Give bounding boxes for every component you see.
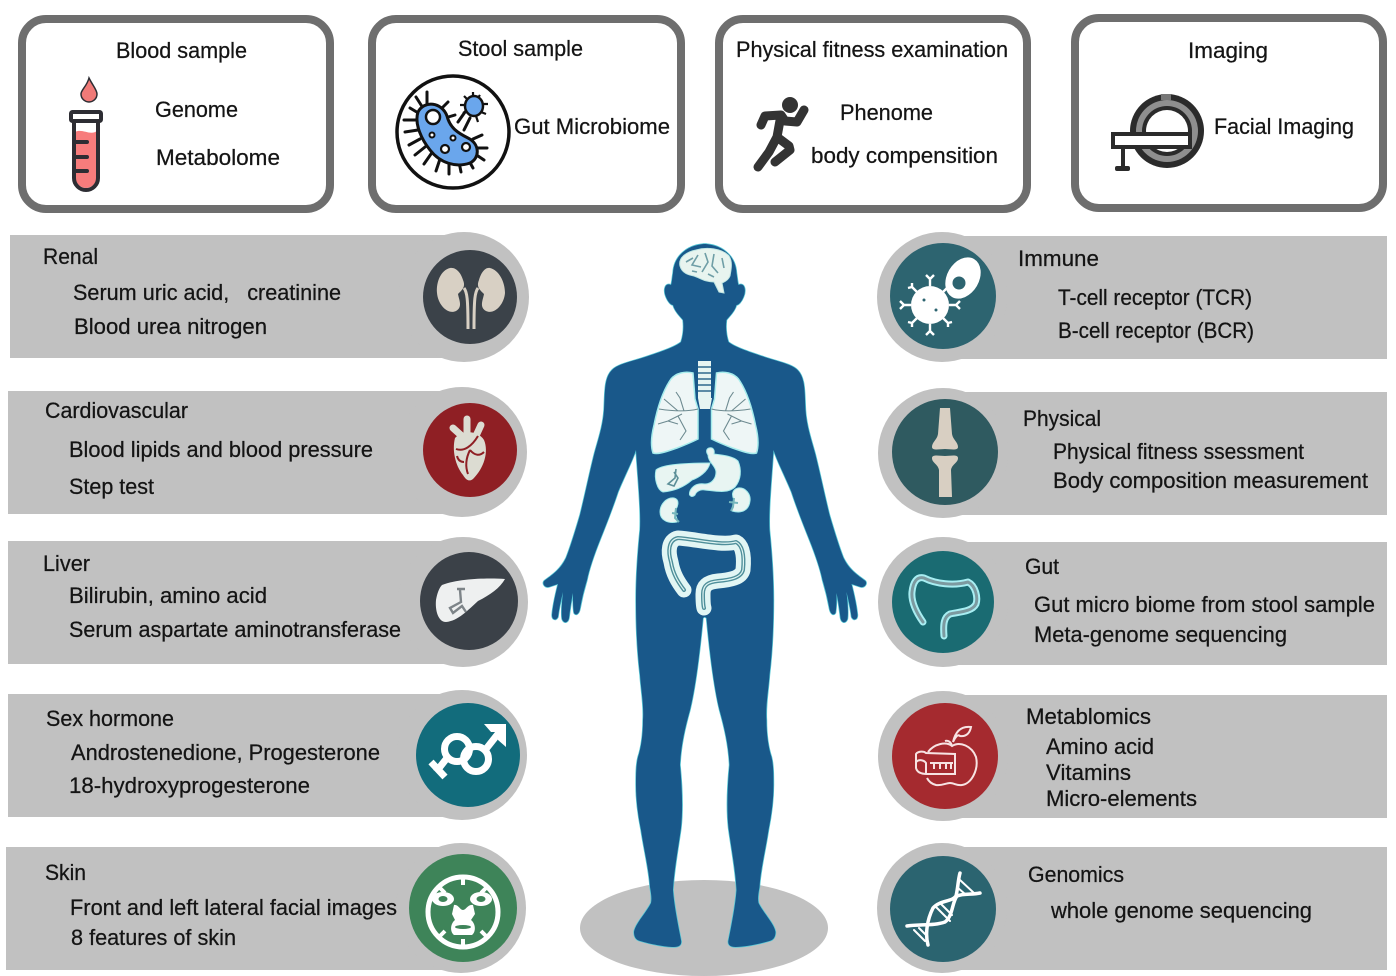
text: gut micro biome from stool sample: Gut micro biome from stool sample bbox=[1034, 592, 1375, 617]
label: facial imaging: Facial Imaging bbox=[1214, 114, 1354, 139]
heading: sex hormone: Sex hormone bbox=[46, 706, 174, 731]
heading: blood sample: Blood sample bbox=[116, 38, 247, 63]
panel: renal bbox=[10, 232, 529, 362]
icon: test tube with blood drop bbox=[71, 78, 101, 190]
lung bronchi bbox=[658, 392, 752, 440]
label: body compensition: body compensition bbox=[811, 143, 998, 168]
icon: intestine bbox=[892, 551, 994, 653]
heading: physical: Physical bbox=[1023, 406, 1101, 431]
human body with organs bbox=[543, 244, 866, 947]
text: t-cell receptor: T-cell receptor (TCR) bbox=[1058, 285, 1252, 310]
label: gut microbiome: Gut Microbiome bbox=[514, 114, 670, 139]
card: imaging bbox=[1075, 18, 1383, 208]
icon: MRI scanner bbox=[1113, 94, 1204, 171]
heading: physical fitness examination: Physical fitness examination bbox=[736, 37, 1008, 62]
text: blood urea nitrogen: Blood urea nitrogen bbox=[74, 314, 267, 339]
icon: DNA helix bbox=[890, 856, 996, 962]
organ: liver bbox=[655, 463, 710, 492]
panel: gut bbox=[878, 537, 1387, 667]
text: meta-genome sequencing: Meta-genome sequencing bbox=[1034, 622, 1287, 647]
icon: apple with measuring tape bbox=[892, 703, 998, 809]
text: bilirubin, amino acid: Bilirubin, amino acid bbox=[69, 583, 267, 608]
organ: colon bbox=[669, 538, 743, 608]
panel: genomics bbox=[877, 843, 1387, 973]
panel: sex hormone bbox=[8, 690, 527, 820]
heading: gut: Gut bbox=[1025, 554, 1059, 579]
text: step test: Step test bbox=[69, 474, 154, 499]
heading: genomics: Genomics bbox=[1028, 862, 1124, 887]
text: amino acid: Amino acid bbox=[1046, 734, 1154, 759]
text: front and left lateral facial images: Front and left lateral facial images bbox=[70, 895, 397, 920]
text: serum uric acid, creatinine: Serum uric acid, creatinine bbox=[73, 280, 341, 305]
panel: immune bbox=[877, 232, 1387, 362]
text: micro-elements: Micro-elements bbox=[1046, 786, 1197, 811]
heading: cardiovascular: Cardiovascular bbox=[45, 398, 188, 423]
heading: skin: Skin bbox=[45, 860, 86, 885]
organ: lungs bbox=[652, 372, 758, 454]
text: 18-hydroxyprogesterone: 18-hydroxyprogesterone bbox=[69, 773, 310, 798]
organ: stomach bbox=[689, 448, 740, 496]
heading: immune: Immune bbox=[1018, 246, 1099, 271]
label: genome: Genome bbox=[155, 97, 238, 122]
text: physical fitness ssessment: Physical fitness ssessment bbox=[1053, 439, 1304, 464]
panel: liver bbox=[8, 537, 528, 667]
heading: renal: Renal bbox=[43, 244, 98, 269]
heading: imaging: Imaging bbox=[1188, 38, 1268, 63]
icon: kidneys bbox=[423, 250, 517, 344]
heading: metablomics: Metablomics bbox=[1026, 704, 1151, 729]
text: serum aspartate aminotransferase: Serum aspartate aminotransferase bbox=[69, 617, 401, 642]
text: b-cell receptor: B-cell receptor (BCR) bbox=[1058, 318, 1254, 343]
panel: physical bbox=[878, 388, 1387, 518]
text: whole genome sequencing: whole genome sequencing bbox=[1050, 898, 1312, 923]
icon: runner bbox=[758, 97, 804, 167]
card: blood sample bbox=[22, 19, 330, 209]
card: stool sample bbox=[372, 19, 681, 209]
label: phenome: Phenome bbox=[840, 100, 933, 125]
text: androstenedione, progesterone: Androstenedione, Progesterone bbox=[71, 740, 380, 765]
label: metabolome: Metabolome bbox=[156, 145, 280, 170]
icon: face mask bbox=[409, 854, 517, 962]
text: blood lipids and blood pressure: Blood lipids and blood pressure bbox=[69, 437, 373, 462]
text: body composition measurement: Body composition measurement bbox=[1053, 468, 1368, 493]
icon: liver bbox=[420, 552, 518, 650]
ground ellipse bbox=[580, 880, 828, 976]
panel: skin bbox=[6, 843, 526, 973]
organ: kidneys bbox=[660, 488, 750, 523]
icon: bacteria in a circle bbox=[397, 76, 509, 188]
panel: metablomics bbox=[878, 691, 1387, 821]
organ: trachea bbox=[698, 361, 712, 409]
organ: brain bbox=[680, 248, 731, 293]
icon: immune cells bbox=[890, 243, 996, 349]
card: physical fitness examination bbox=[719, 19, 1027, 209]
silhouette bbox=[543, 244, 866, 947]
heading: liver: Liver bbox=[43, 551, 90, 576]
icon: knee joint bbox=[892, 399, 998, 505]
text: 8 features of skin: 8 features of skin bbox=[71, 925, 236, 950]
panel: cardiovascular bbox=[8, 387, 527, 517]
icon: heart bbox=[423, 403, 517, 497]
icon: gender symbols bbox=[416, 703, 520, 807]
text: vitamins: Vitamins bbox=[1046, 760, 1131, 785]
heading: stool sample: Stool sample bbox=[458, 36, 583, 61]
